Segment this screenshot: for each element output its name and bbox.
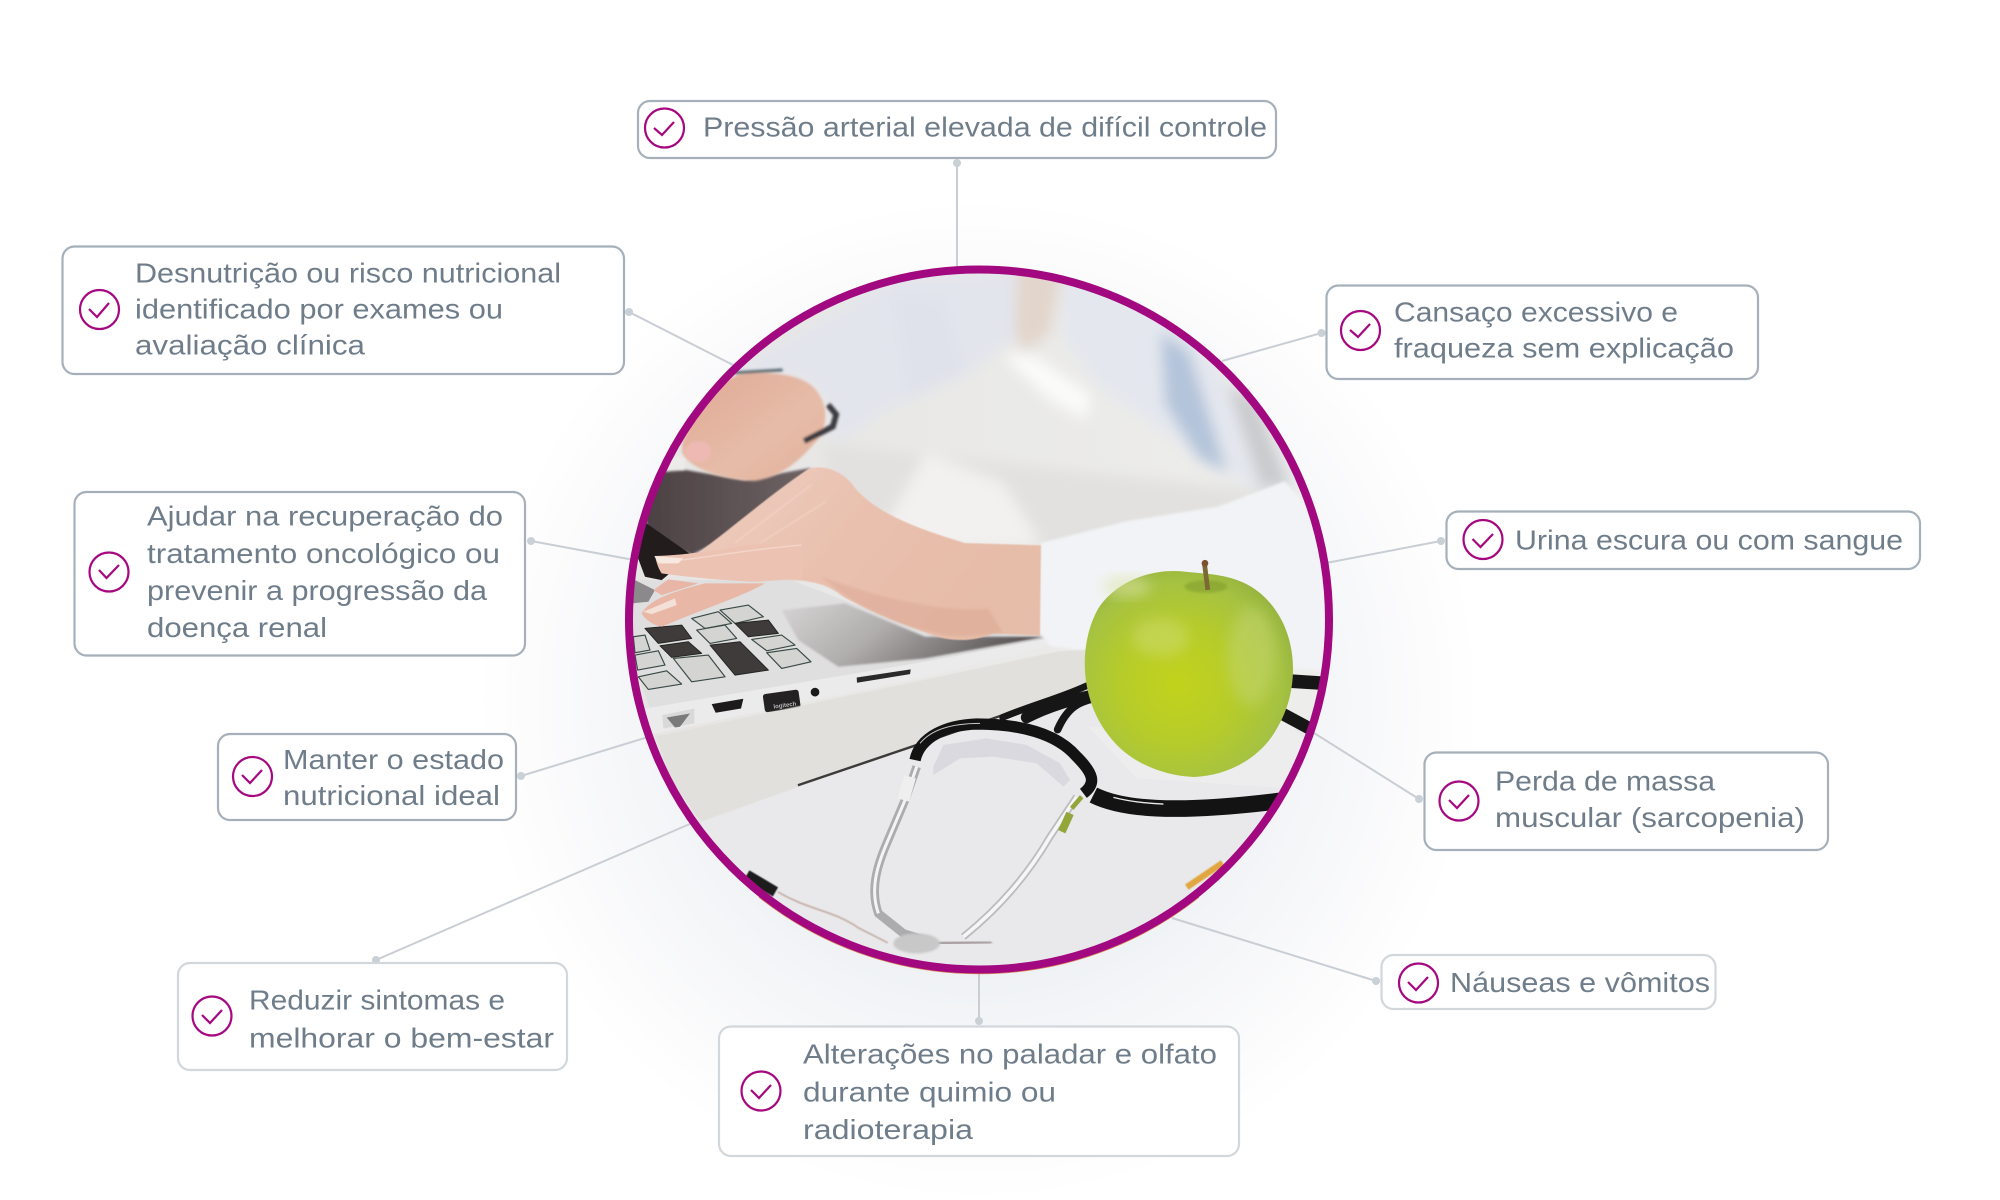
icon: check bbox=[90, 552, 128, 592]
central circular photo bbox=[625, 266, 1333, 974]
keyboard, deck and hand detail: logitech bbox=[773, 701, 797, 711]
text: doença renal bbox=[147, 612, 327, 643]
panel: náuseas bbox=[1382, 955, 1716, 1009]
panel: reduzir sintomas bbox=[178, 963, 567, 1070]
text: fraqueza sem explicação bbox=[1394, 332, 1734, 364]
connector lines bbox=[372, 159, 1445, 1025]
text: melhorar o bem-estar bbox=[249, 1022, 554, 1054]
panel: urina bbox=[1446, 512, 1920, 569]
text: Reduzir sintomas e bbox=[249, 984, 505, 1016]
background glow bbox=[479, 200, 1479, 1200]
apple bbox=[1085, 560, 1293, 777]
text: identificado por exames ou bbox=[135, 294, 503, 324]
text: avaliação clínica bbox=[135, 330, 365, 360]
stethoscope headset bbox=[875, 723, 1287, 953]
icon: check bbox=[742, 1072, 780, 1110]
panel: cansaço bbox=[1326, 286, 1758, 379]
panel: ajudar na recuperação bbox=[74, 492, 525, 656]
text: muscular (sarcopenia) bbox=[1495, 802, 1805, 833]
icon: check bbox=[1399, 964, 1438, 1002]
text: Perda de massa bbox=[1495, 766, 1715, 796]
paper surface bbox=[702, 718, 999, 822]
text: Urina escura ou com sangue bbox=[1515, 524, 1903, 556]
blurred cable and pen bbox=[747, 863, 1223, 943]
panel: manter estado nutricional bbox=[218, 734, 516, 820]
typing hand bbox=[677, 467, 1041, 640]
stethoscope tube around apple bbox=[1003, 681, 1328, 731]
text: tratamento oncológico ou bbox=[147, 538, 500, 569]
text: radioterapia bbox=[803, 1114, 973, 1145]
icon: check bbox=[233, 757, 272, 796]
icon: check bbox=[192, 996, 232, 1036]
panel: perda de massa bbox=[1424, 752, 1828, 850]
text: nutricional ideal bbox=[283, 780, 500, 811]
icon: check bbox=[1464, 520, 1502, 559]
text: Alterações no paladar e olfato bbox=[803, 1038, 1217, 1070]
text: Cansaço excessivo e bbox=[1394, 296, 1678, 328]
fingers bbox=[642, 543, 805, 627]
text: Desnutrição ou risco nutricional bbox=[135, 258, 561, 288]
icon: check bbox=[1341, 311, 1380, 350]
icon: check bbox=[1440, 782, 1478, 820]
icon: check bbox=[80, 290, 119, 329]
panel: desnutrição bbox=[62, 246, 624, 374]
text: Náuseas e vômitos bbox=[1450, 967, 1710, 998]
table under laptop bbox=[656, 650, 1098, 822]
front sleeve bbox=[1039, 481, 1328, 671]
laptop screen bbox=[639, 468, 811, 555]
text: durante quimio ou bbox=[803, 1076, 1056, 1108]
keyboard, deck and hand detail bbox=[625, 520, 1058, 734]
text: Ajudar na recuperação do bbox=[147, 500, 503, 532]
text: Pressão arterial elevada de difícil controle bbox=[703, 112, 1267, 142]
panel: pressão arterial bbox=[638, 101, 1276, 158]
purple ring bbox=[629, 270, 1329, 970]
icon: check bbox=[645, 108, 684, 148]
text: Manter o estado bbox=[283, 744, 504, 775]
panel: alterações no paladar bbox=[719, 1026, 1239, 1156]
text: prevenir a progressão da bbox=[147, 575, 487, 606]
back hand bbox=[682, 370, 836, 481]
